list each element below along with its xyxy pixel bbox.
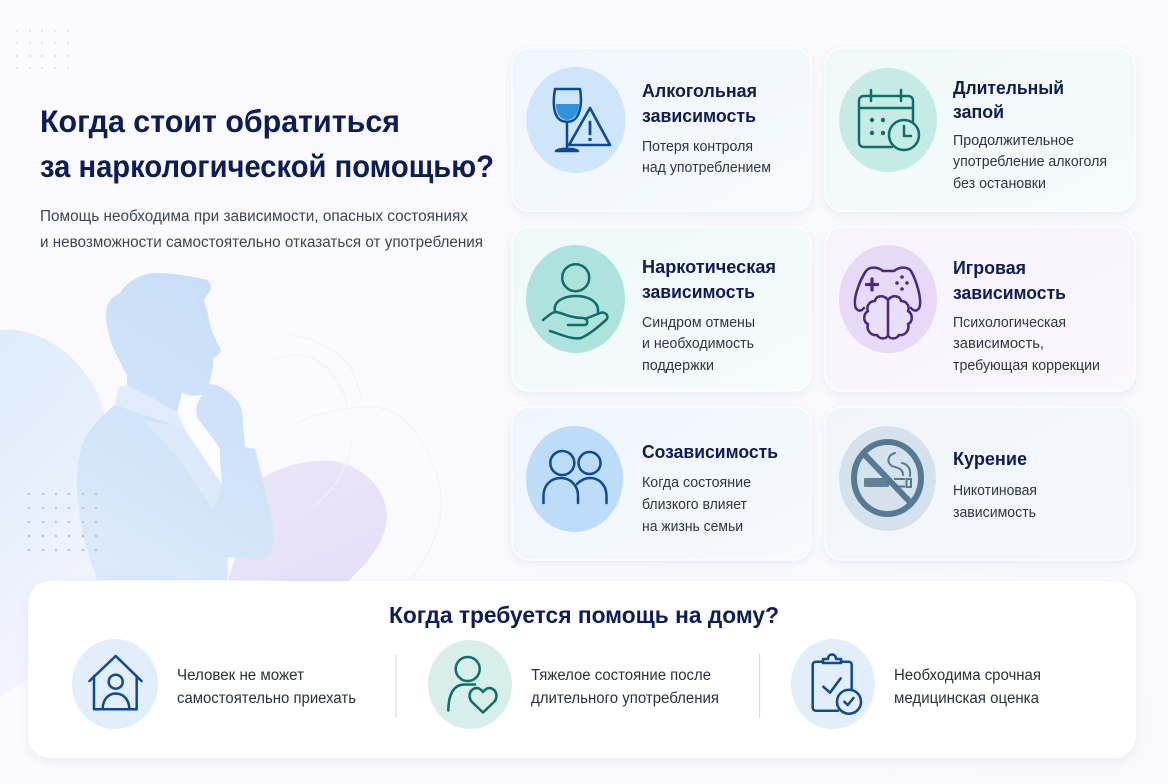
title bbox=[40, 103, 494, 184]
panel: drug addiction bbox=[512, 227, 811, 391]
decorative blob: purple bbox=[228, 461, 387, 582]
card heading: зависимость bbox=[642, 281, 755, 302]
jacket collar bbox=[115, 385, 185, 431]
title: Когда стоит обратиться bbox=[40, 103, 400, 139]
card heading bbox=[642, 256, 776, 302]
card description: Никотиновая bbox=[953, 483, 1037, 499]
card heading: Длительный bbox=[953, 77, 1064, 98]
decorative blob: blue bbox=[0, 330, 104, 697]
shirt gap bbox=[177, 393, 222, 485]
dot grid: top left bbox=[16, 30, 69, 69]
card description bbox=[953, 315, 1100, 374]
item text: Необходима срочная bbox=[894, 667, 1041, 684]
dot grid: over silhouette bbox=[28, 493, 97, 551]
panel: alcohol addiction bbox=[512, 48, 811, 211]
card heading: Курение bbox=[953, 448, 1027, 469]
silhouette of a thinking man bbox=[77, 273, 274, 580]
card heading: зависимость bbox=[953, 282, 1066, 303]
card description: Продолжительное bbox=[953, 133, 1074, 149]
card description bbox=[642, 315, 755, 374]
card heading bbox=[953, 257, 1066, 303]
card description: над употреблением bbox=[642, 160, 771, 176]
card heading: Созависимость bbox=[642, 441, 778, 462]
icon: clipboard with check bbox=[813, 654, 861, 714]
icon: person with heart bbox=[448, 657, 496, 712]
card heading: Наркотическая bbox=[642, 256, 776, 277]
card description: без остановки bbox=[953, 176, 1046, 192]
card description: Психологическая bbox=[953, 315, 1066, 331]
card description: близкого влияет bbox=[642, 497, 747, 513]
card description bbox=[642, 139, 771, 176]
item text: длительного употребления bbox=[531, 690, 719, 707]
card description: и необходимость bbox=[642, 336, 754, 352]
icon: person held in a hand bbox=[543, 264, 607, 338]
panel: gaming addiction bbox=[825, 227, 1135, 391]
icon: two people bbox=[544, 451, 606, 503]
card heading: Алкогольная bbox=[642, 80, 757, 101]
card description bbox=[953, 483, 1037, 521]
panel: long binge bbox=[825, 48, 1135, 211]
card heading bbox=[953, 77, 1064, 122]
card description: на жизнь семьи bbox=[642, 519, 743, 535]
item: cannot travel bbox=[72, 639, 356, 729]
icon: calendar with clock bbox=[859, 90, 919, 150]
card description: Потеря контроля bbox=[642, 139, 753, 155]
card heading: Игровая bbox=[953, 257, 1026, 278]
panel: home help bbox=[28, 581, 1136, 758]
subtitle: Помощь необходима при зависимости, опасных состояниях bbox=[40, 208, 468, 225]
decorative thin curves bbox=[273, 334, 441, 580]
icon: person in house bbox=[90, 656, 142, 709]
icon: wine glass with warning bbox=[554, 89, 610, 151]
card description: зависимость bbox=[953, 505, 1036, 521]
item text bbox=[177, 667, 356, 707]
item: severe condition bbox=[428, 640, 719, 729]
item text: самостоятельно приехать bbox=[177, 690, 356, 707]
card description: Когда состояние bbox=[642, 475, 751, 491]
title: за наркологической помощью? bbox=[40, 148, 494, 184]
card description: зависимость, bbox=[953, 336, 1044, 352]
card description bbox=[642, 475, 751, 535]
subtitle: и невозможности самостоятельно отказаться от употребления bbox=[40, 234, 483, 251]
subtitle bbox=[40, 208, 483, 251]
card description: Синдром отмены bbox=[642, 315, 755, 331]
card description: требующая коррекции bbox=[953, 358, 1100, 374]
item: urgent assessment bbox=[791, 639, 1041, 729]
icon: gamepad and brain bbox=[855, 268, 920, 338]
panel: smoking bbox=[825, 407, 1135, 560]
item text: Тяжелое состояние после bbox=[531, 667, 711, 684]
item text bbox=[531, 667, 719, 707]
card description: поддержки bbox=[642, 358, 714, 374]
card description: употребление алкоголя bbox=[953, 154, 1107, 170]
card heading: запой bbox=[953, 101, 1004, 122]
card description bbox=[953, 133, 1107, 192]
panel heading: Когда требуется помощь на дому? bbox=[389, 602, 779, 628]
item text: Человек не может bbox=[177, 667, 304, 684]
lapel bbox=[143, 420, 222, 510]
panel: codependency bbox=[512, 407, 811, 560]
item text: медицинская оценка bbox=[894, 690, 1039, 707]
card heading bbox=[642, 80, 757, 126]
card heading: зависимость bbox=[642, 105, 756, 126]
icon: no smoking bbox=[854, 442, 921, 514]
item text bbox=[894, 667, 1041, 707]
